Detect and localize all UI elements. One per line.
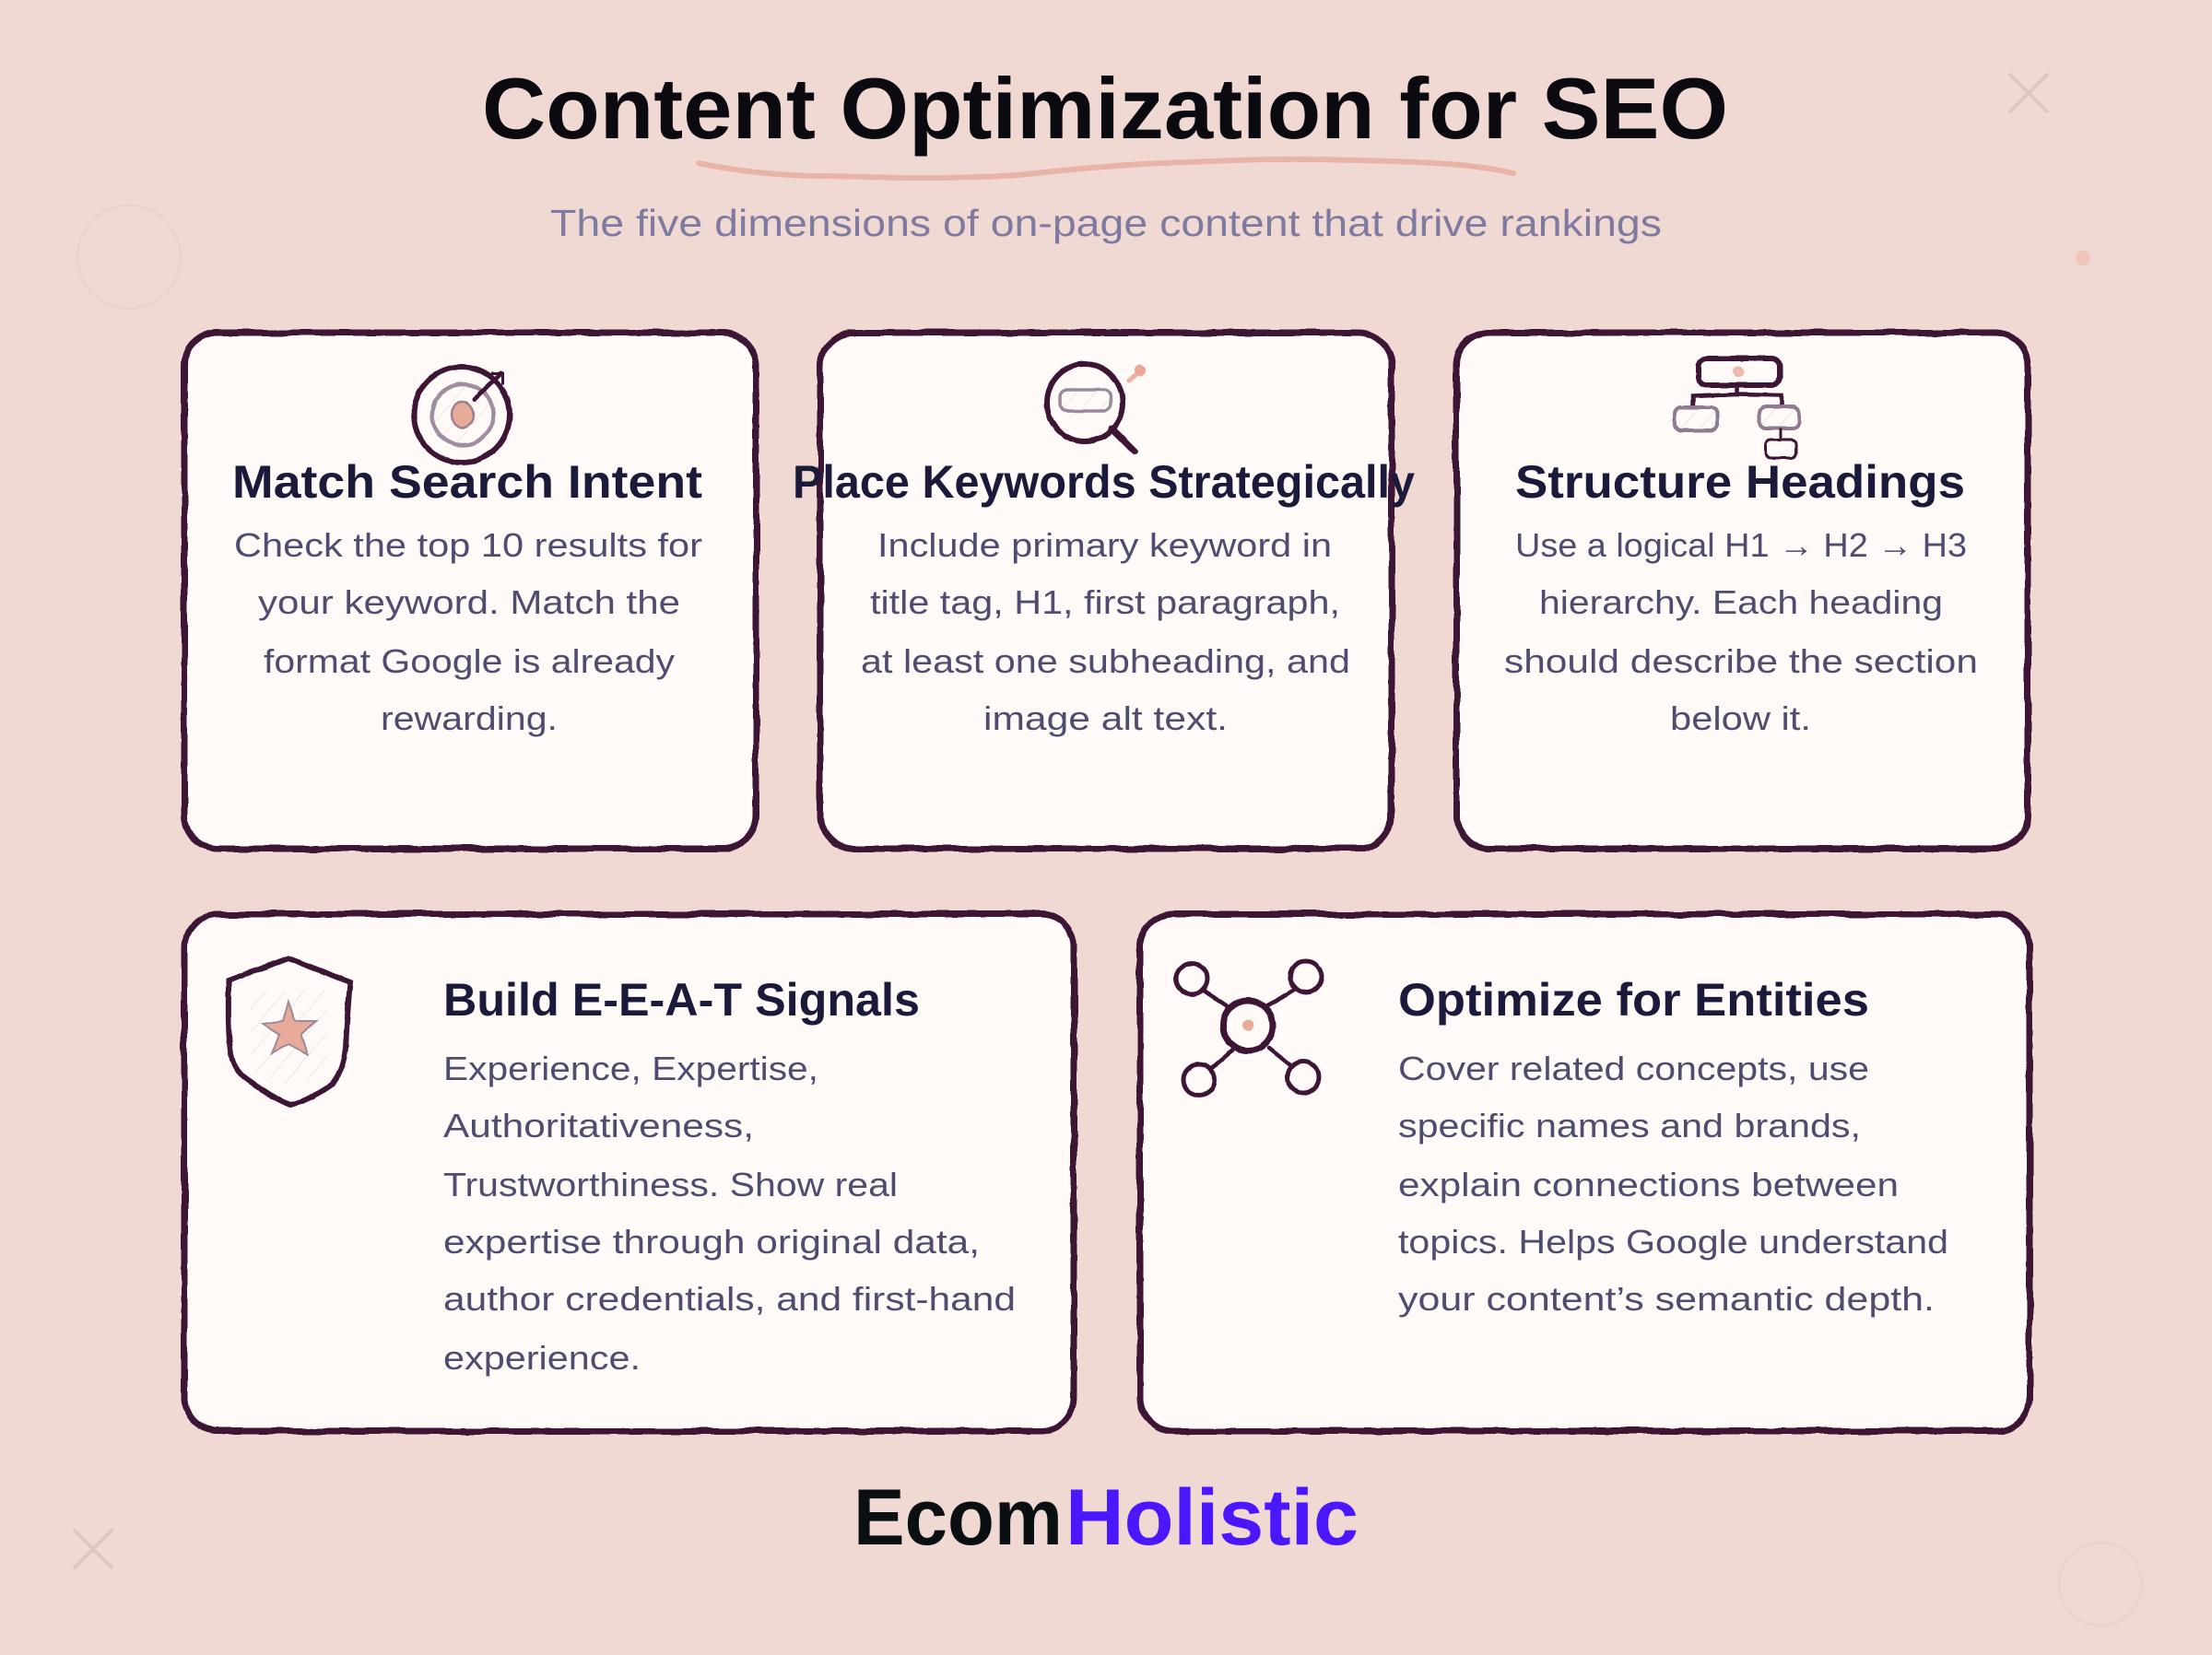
body text: [1504, 526, 1978, 737]
body text: Experience, Expertise,: [443, 1050, 818, 1087]
card border: [1140, 914, 2030, 1431]
body text: [443, 1050, 1016, 1377]
body text: Include primary keyword in: [877, 526, 1332, 564]
body text: [234, 526, 702, 737]
panel: structure headings: [1456, 333, 2028, 849]
footer brand logo: Ecom: [853, 1473, 1063, 1562]
heading: Match Search Intent: [232, 456, 702, 508]
body text: topics. Helps Google understand: [1398, 1223, 1948, 1261]
body text: your content’s semantic depth.: [1398, 1280, 1935, 1318]
body text: title tag, H1, first paragraph,: [870, 583, 1340, 621]
decoration: circle top left: [77, 205, 181, 309]
panel: optimize for entities: [1140, 914, 2030, 1431]
body text: rewarding.: [381, 699, 558, 737]
decoration: cross bottom left: [75, 1531, 112, 1567]
icon: heading hierarchy: [1675, 358, 1799, 458]
card border: [184, 914, 1074, 1431]
heading: Place Keywords Strategically: [793, 456, 1415, 508]
body text: [1398, 1050, 1948, 1318]
icon: target: [414, 367, 510, 463]
footer brand logo: Holistic: [1065, 1473, 1359, 1562]
body text: below it.: [1670, 699, 1811, 737]
card border: [820, 333, 1392, 849]
subtitle: The five dimensions of on-page content that drive rankings: [550, 202, 1662, 244]
heading: Structure Headings: [1515, 456, 1965, 508]
decoration: circle bottom right: [2059, 1543, 2142, 1626]
title: Content Optimization for SEO: [482, 60, 1728, 157]
body text: hierarchy. Each heading: [1539, 583, 1943, 621]
decoration: dot top right: [2076, 251, 2090, 265]
body text: expertise through original data,: [443, 1223, 980, 1261]
body text: format Google is already: [264, 642, 675, 680]
body text: author credentials, and first-hand: [443, 1280, 1016, 1318]
icon: entity network: [1176, 961, 1322, 1096]
body text: Use a logical H1 → H2 → H3: [1515, 526, 1967, 564]
body text: Cover related concepts, use: [1398, 1050, 1869, 1087]
panel: build E-E-A-T signals: [184, 914, 1074, 1431]
heading: Optimize for Entities: [1398, 974, 1869, 1026]
decoration: cross top right: [2010, 75, 2047, 112]
body text: your keyword. Match the: [258, 583, 680, 621]
body text: image alt text.: [983, 699, 1228, 737]
footer brand logo: [853, 1473, 1359, 1562]
body text: at least one subheading, and: [861, 642, 1350, 680]
heading: Build E-E-A-T Signals: [443, 974, 920, 1026]
body text: explain connections between: [1398, 1166, 1899, 1203]
card border: [184, 333, 756, 849]
title underline: [699, 159, 1513, 178]
body text: Authoritativeness,: [443, 1107, 754, 1144]
body text: specific names and brands,: [1398, 1107, 1861, 1144]
panel: match search intent: [184, 333, 756, 849]
body text: Trustworthiness. Show real: [443, 1166, 898, 1203]
panel: place keywords strategically: [793, 333, 1415, 849]
body text: Check the top 10 results for: [234, 526, 702, 564]
body text: [861, 526, 1350, 737]
card border: [1456, 333, 2028, 849]
body text: experience.: [443, 1339, 641, 1377]
icon: shield with star: [229, 958, 350, 1105]
icon: magnifier: [1047, 364, 1146, 452]
body text: should describe the section: [1504, 642, 1978, 680]
